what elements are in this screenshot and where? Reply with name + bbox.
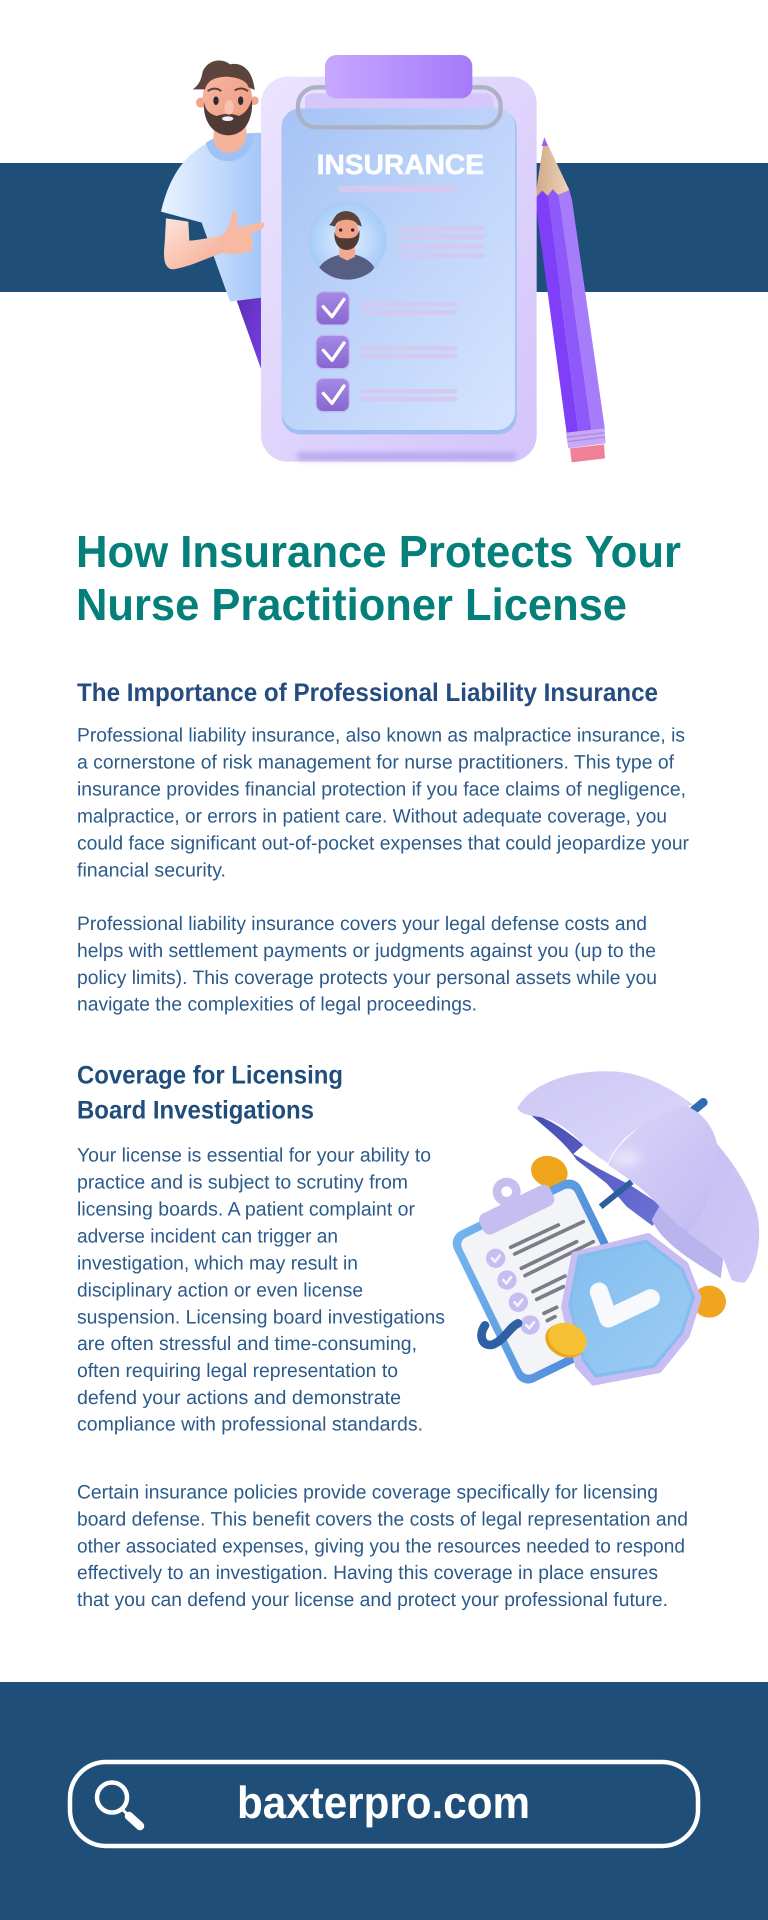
text block: professional liability paragraph 1: could face significant out-of-pocket expenses that could jeopardize your xyxy=(77,832,689,854)
footer band xyxy=(0,1682,768,1920)
clipboard board xyxy=(261,55,537,462)
clipboard heading: INSURANCE: INSURANCE xyxy=(317,149,484,180)
pencil xyxy=(535,137,606,462)
text block: licensing board investigations: licensing boards. A patient complaint or xyxy=(77,1199,416,1221)
text block: licensing board investigations: investigation, which may result in xyxy=(77,1252,358,1274)
text block: licensing board defense coverage: that you can defend your license and protect your professional future. xyxy=(77,1589,668,1611)
text block: professional liability paragraph 2 xyxy=(77,913,657,1016)
title: How Insurance Protects Your xyxy=(76,526,681,577)
text block: professional liability paragraph 2: navigate the complexities of legal proceedings. xyxy=(77,994,477,1016)
coin behind clipboard xyxy=(527,1151,572,1192)
text block: professional liability paragraph 1: insurance provides financial protection if you face claims of negligence, xyxy=(77,779,686,801)
text block: professional liability paragraph 1: malpractice, or errors in patient care. Without adequate coverage, you xyxy=(77,806,667,828)
text block: professional liability paragraph 1: Professional liability insurance, also known as malpractice insurance, is xyxy=(77,725,685,747)
text block: licensing board investigations: practice and is subject to scrutiny from xyxy=(77,1172,408,1194)
text block: licensing board defense coverage: Certain insurance policies provide coverage specifically for licensing xyxy=(77,1481,658,1503)
hero illustration: man with insurance clipboard and pencil xyxy=(161,55,606,462)
header band xyxy=(0,163,768,292)
pointing hand xyxy=(218,211,264,254)
text block: licensing board defense coverage: other associated expenses, giving you the resources needed to respond xyxy=(77,1535,685,1557)
checklist xyxy=(316,292,457,412)
coin front xyxy=(540,1316,592,1364)
title: Nurse Practitioner License xyxy=(76,579,627,630)
heading: licensing board investigations: Board Investigations xyxy=(77,1097,314,1125)
heading: licensing board investigations xyxy=(77,1061,343,1125)
text block: licensing board investigations: Your license is essential for your ability to xyxy=(77,1145,431,1167)
text block: licensing board investigations: are often stressful and time-consuming, xyxy=(77,1333,417,1355)
profile text lines xyxy=(398,226,485,258)
text block: professional liability paragraph 2: policy limits). This coverage protects your personal assets while you xyxy=(77,967,657,989)
heading: licensing board investigations: Coverage for Licensing xyxy=(77,1061,343,1089)
title xyxy=(76,526,681,630)
heading: professional liability: The Importance of Professional Liability Insurance xyxy=(77,679,658,707)
text block: professional liability paragraph 2: helps with settlement payments or judgments against you (up to the xyxy=(77,940,656,962)
umbrella xyxy=(517,1071,759,1283)
avatar portrait xyxy=(308,202,386,282)
shield with check xyxy=(563,1235,699,1383)
text block: licensing board defense coverage: effectively to an investigation. Having this coverage in place ensures xyxy=(77,1562,658,1584)
text block: licensing board defense coverage xyxy=(77,1481,688,1611)
text block: licensing board investigations: adverse incident can trigger an xyxy=(77,1225,338,1247)
illustration: umbrella protecting clipboard and shield xyxy=(448,1071,759,1388)
text block: licensing board investigations: often requiring legal representation to xyxy=(77,1360,398,1382)
tilted clipboard with checklist xyxy=(448,1175,649,1388)
text block: professional liability paragraph 1: a cornerstone of risk management for nurse practitioners. This type of xyxy=(77,752,675,774)
man figure xyxy=(161,60,262,371)
text block: licensing board investigations: suspension. Licensing board investigations xyxy=(77,1306,445,1328)
icon: magnifying glass xyxy=(97,1782,140,1826)
text block: licensing board investigations: defend your actions and demonstrate xyxy=(77,1387,401,1409)
coin behind shield xyxy=(693,1286,726,1318)
text block: licensing board investigations: compliance with professional standards. xyxy=(77,1414,423,1436)
text block: licensing board investigations xyxy=(77,1145,445,1436)
text block: professional liability paragraph 1: financial security. xyxy=(77,859,226,881)
text block: professional liability paragraph 2: Professional liability insurance covers your legal defense costs and xyxy=(77,913,647,935)
website url: baxterpro.com xyxy=(237,1777,530,1828)
text block: licensing board defense coverage: board defense. This benefit covers the costs of legal representation and xyxy=(77,1508,688,1530)
text block: licensing board investigations: disciplinary action or even license xyxy=(77,1279,363,1301)
text block: professional liability paragraph 1 xyxy=(77,725,689,881)
search bar outline xyxy=(70,1762,698,1846)
heading rule xyxy=(338,186,457,192)
